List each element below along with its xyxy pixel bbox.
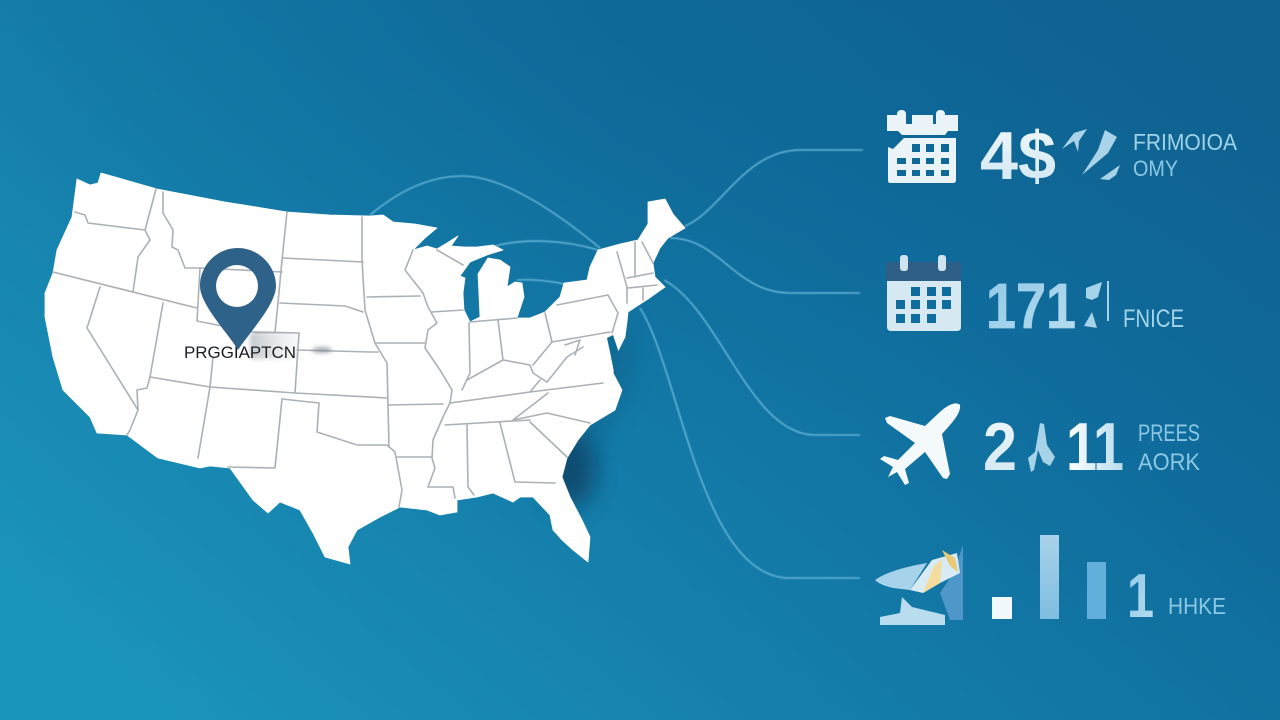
bar 3 bbox=[1087, 562, 1106, 619]
stat row 1 bbox=[887, 110, 1238, 194]
stat row 4 bbox=[875, 535, 1226, 631]
value: 11 bbox=[1066, 410, 1124, 485]
Chesapeake Bay detail bbox=[607, 335, 620, 372]
location label box bbox=[254, 333, 299, 360]
value: 1 bbox=[1127, 562, 1154, 631]
label: HHKE bbox=[1168, 593, 1226, 619]
map of the United States bbox=[45, 173, 685, 564]
stat row 3 bbox=[880, 403, 1200, 485]
icon: dish with folded map bbox=[875, 545, 963, 625]
icon: airplane bbox=[880, 403, 960, 485]
value: 2 bbox=[983, 409, 1017, 485]
label: FNICE bbox=[1123, 305, 1184, 333]
location label: PRGGIAPTCN bbox=[184, 343, 296, 362]
label: PREES bbox=[1138, 420, 1200, 447]
sub label: OMY bbox=[1133, 156, 1178, 181]
value: 171 bbox=[986, 270, 1076, 342]
location pin bbox=[200, 248, 276, 350]
map landmass bbox=[45, 173, 685, 564]
stat row 2 bbox=[886, 255, 1184, 342]
icon: calendar white bbox=[887, 110, 958, 183]
icon: calendar blue header bbox=[886, 255, 961, 331]
connector lines from map to stats bbox=[370, 150, 863, 578]
decorative shards bbox=[1084, 281, 1109, 328]
bar 1 bbox=[992, 597, 1012, 619]
sub label: AORK bbox=[1138, 449, 1200, 476]
location label smudge bbox=[250, 333, 332, 359]
decorative shards bbox=[1062, 129, 1120, 180]
label: FRIMOIOA bbox=[1133, 129, 1238, 155]
bar 2 bbox=[1040, 535, 1059, 619]
decorative shard bbox=[1028, 423, 1055, 472]
value: 4$ bbox=[980, 118, 1056, 194]
state borders bbox=[53, 189, 657, 507]
map shadow bbox=[544, 320, 632, 508]
